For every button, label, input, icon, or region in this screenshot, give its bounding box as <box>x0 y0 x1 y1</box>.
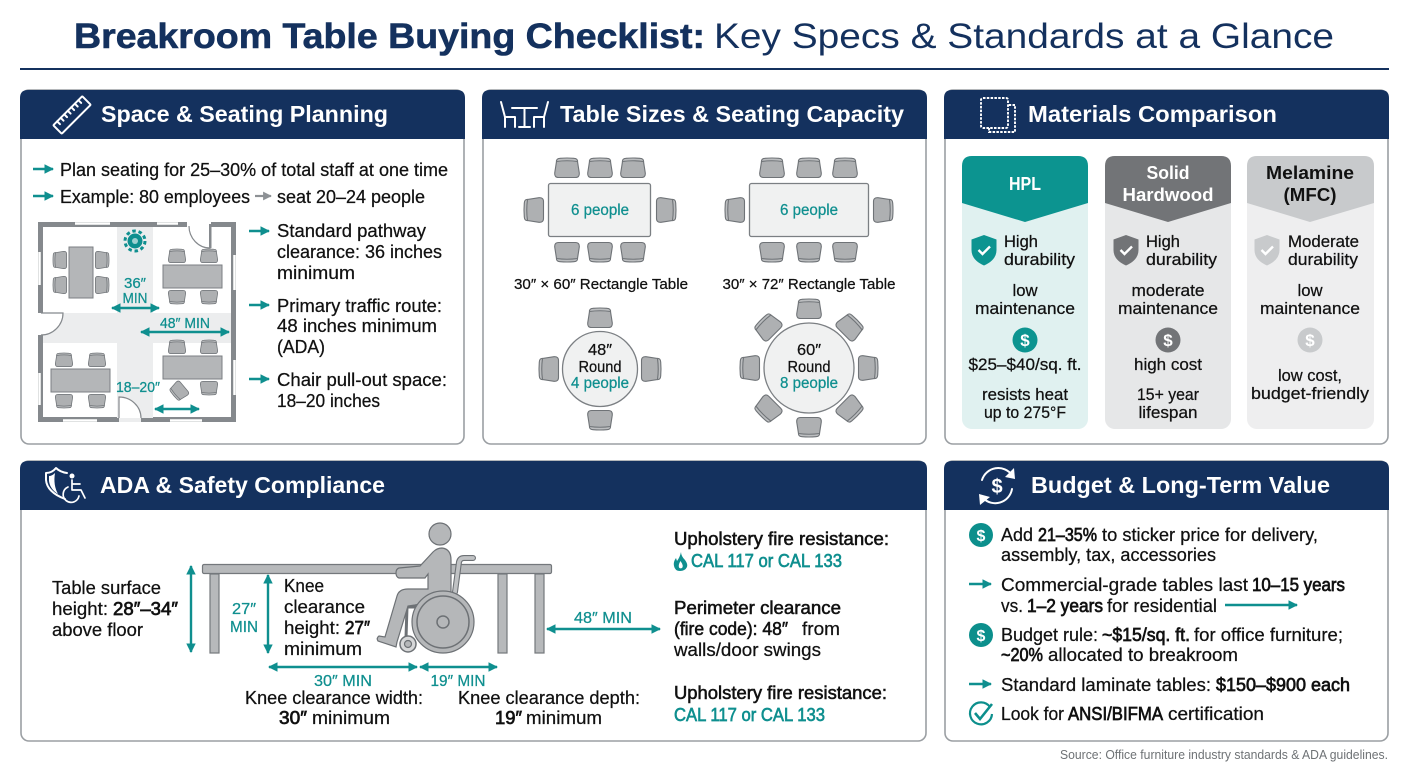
bullet: budget rule: $ <box>977 628 986 645</box>
fire resistance note with flame: Upholstery fire resistance: <box>674 529 889 549</box>
heading: space and seating planning: Space & Seating Planning <box>101 101 388 127</box>
label: knee clearance width <box>245 673 423 728</box>
card: solid hardwood: moderate <box>1132 281 1204 300</box>
title: Key Specs & Standards at a Glance <box>714 17 1334 56</box>
label: 48 inch minimum: 48″ MIN <box>574 610 632 627</box>
bullet: commercial-grade lifespan: Commercial-grade tables last <box>1001 575 1248 595</box>
clearance bullets: Chair pull-out space: <box>277 370 447 390</box>
label: knee clearance depth: Knee clearance depth: <box>458 688 640 708</box>
table: 48 inch round: 48″ <box>588 342 613 359</box>
heading: ADA and safety: ADA & Safety Compliance <box>100 472 385 498</box>
table: 30 by 60 rectangle: 6 people <box>571 202 629 219</box>
card: melamine: budget-friendly <box>1251 384 1370 403</box>
panel: space and seating planning <box>20 90 465 444</box>
source note: Source: Office furniture industry standards & ADA guidelines. <box>1060 748 1388 762</box>
bullet: commercial-grade lifespan: for residential <box>1107 596 1217 616</box>
card: HPL: HPL <box>1009 174 1041 194</box>
card: solid hardwood: Solid <box>1146 163 1190 183</box>
label: knee clearance depth: 19″ <box>495 708 523 728</box>
label: knee clearance depth <box>430 673 640 728</box>
table: 30 by 72 rectangle: 6 people <box>780 202 838 219</box>
card: melamine <box>1247 156 1374 429</box>
card: solid hardwood: 15+ year <box>1137 385 1199 404</box>
card: HPL: maintenance <box>975 299 1075 318</box>
card: solid hardwood <box>1105 156 1231 429</box>
icon: ruler <box>53 96 91 134</box>
card: melamine: low cost, <box>1278 366 1342 385</box>
label: knee clearance height: minimum <box>284 639 362 659</box>
fire resistance note: CAL 117 or CAL 133 <box>674 704 825 725</box>
clearance bullets: 48 inches minimum <box>277 316 437 336</box>
card: melamine: $ <box>1305 331 1315 350</box>
bullet: sticker price <box>969 523 1318 565</box>
card: HPL <box>962 156 1088 429</box>
clearance bullets: Standard pathway <box>277 221 426 241</box>
label: knee clearance width: 30″ <box>279 708 308 728</box>
bullet: budget rule <box>969 623 1343 665</box>
card: HPL: durability <box>1004 250 1076 269</box>
table: 48 inch round: Round <box>578 359 622 376</box>
card: HPL: low <box>1012 281 1038 300</box>
label: knee clearance height: Knee <box>284 576 324 596</box>
label: knee clearance width: minimum <box>312 708 390 728</box>
clearance bullets: 18–20 inches <box>277 391 380 411</box>
fire resistance note with flame: CAL 117 or CAL 133 <box>691 550 842 571</box>
icon: circular dollar arrows: $ <box>991 476 1003 498</box>
card: melamine: (MFC) <box>1284 185 1336 205</box>
bullet: sticker price: assembly, tax, accessories <box>1001 545 1216 565</box>
card: melamine: maintenance <box>1260 299 1360 318</box>
clearance labels: 36″ <box>124 275 147 292</box>
card: HPL: resists heat <box>982 385 1068 404</box>
bullet: laminate price: $150–$900 each <box>1216 675 1350 695</box>
perimeter clearance note: Perimeter clearance <box>674 598 841 618</box>
clearance bullets: (ADA) <box>277 337 325 357</box>
label: knee clearance height: 27″ <box>345 618 371 638</box>
bullet: sticker price: $ <box>977 528 986 545</box>
title <box>74 17 1334 56</box>
card: HPL: $ <box>1020 331 1030 350</box>
heading: table sizes: Table Sizes & Seating Capacity <box>560 101 904 127</box>
perimeter clearance note: from <box>802 619 840 639</box>
fire resistance note with flame <box>674 529 889 571</box>
label: knee clearance depth: 19″ MIN <box>430 673 486 690</box>
label: knee clearance depth: minimum <box>526 708 602 728</box>
card: solid hardwood: lifespan <box>1138 403 1198 422</box>
icon: material samples <box>981 98 1015 132</box>
label: knee clearance height: 27″ <box>232 601 256 618</box>
intro bullets: seat 20–24 people <box>277 187 425 207</box>
bullet: commercial-grade lifespan: 1–2 years <box>1027 596 1103 616</box>
bullet: certification: Look for <box>1001 704 1064 724</box>
floor plan chairs <box>53 249 218 408</box>
bullet: laminate price: Standard laminate tables: <box>1001 675 1211 695</box>
clearance labels: 18–20″ <box>116 379 161 396</box>
table: 60 inch round: 60″ <box>797 342 822 359</box>
table: 30 by 72 rectangle <box>722 158 896 293</box>
label: knee clearance height: clearance <box>284 597 365 617</box>
panel: budget and long-term value <box>944 461 1389 741</box>
card: HPL: up to 275°F <box>984 403 1066 422</box>
card: solid hardwood: high cost <box>1134 355 1202 374</box>
perimeter clearance note <box>673 598 841 660</box>
label: knee clearance width: Knee clearance width: <box>245 688 423 708</box>
label: table surface height: 28″–34″ <box>113 599 179 619</box>
panel: ADA and safety compliance <box>20 461 927 741</box>
bullet: commercial-grade lifespan <box>969 575 1345 616</box>
bullet: sticker price: 21–35% <box>1038 525 1097 545</box>
label: knee clearance width: 30″ MIN <box>314 673 372 690</box>
card: solid hardwood: maintenance <box>1118 299 1218 318</box>
table: 30 by 60 rectangle <box>514 158 688 293</box>
card: HPL: High <box>1004 232 1038 251</box>
icon: gear <box>125 231 145 251</box>
clearance bullets: minimum <box>277 263 355 283</box>
panel: materials comparison <box>944 90 1389 444</box>
clearance bullets: Primary traffic route: <box>277 296 442 316</box>
card: melamine: low <box>1298 281 1323 300</box>
perimeter clearance note: (fire code): 48″ <box>674 619 789 639</box>
heading: materials comparison: Materials Comparison <box>1028 101 1277 127</box>
label: table surface height: height: <box>52 599 108 619</box>
table side view <box>202 564 552 653</box>
card: solid hardwood: $ <box>1163 331 1173 350</box>
bullet: certification: ANSI/BIFMA <box>1068 704 1163 724</box>
table: 30 by 60 rectangle: 30″ × 60″ Rectangle Table <box>514 276 688 293</box>
bullet: budget rule: ~$15/sq. ft. <box>1102 625 1190 645</box>
clearance bullets: clearance: 36 inches <box>277 242 442 262</box>
dimension arrows <box>191 566 660 667</box>
table: 30 by 72 rectangle: 30″ × 72″ Rectangle Table <box>722 276 896 293</box>
bullet: certification: certification <box>1168 704 1264 724</box>
bullet: laminate price <box>969 675 1350 695</box>
perimeter clearance note: walls/door swings <box>673 640 821 660</box>
bullet: certification <box>970 702 1264 724</box>
title: Breakroom Table Buying Checklist: <box>74 17 705 56</box>
label: knee clearance height: height: <box>284 618 340 638</box>
bullet: budget rule: for office furniture; <box>1194 625 1343 645</box>
bullet: budget rule: ~20% <box>1001 645 1043 665</box>
clearance bullets <box>249 221 447 411</box>
intro bullets <box>33 160 448 207</box>
card: melamine: Moderate <box>1288 232 1359 251</box>
card: melamine: durability <box>1288 250 1359 269</box>
wheelchair user figure <box>377 523 474 653</box>
table: 60 inch round: 8 people <box>780 375 838 392</box>
card: melamine: Melamine <box>1266 163 1354 183</box>
clearance labels: MIN <box>122 290 148 307</box>
card: solid hardwood: High <box>1146 232 1180 251</box>
label: knee clearance height: MIN <box>230 619 258 636</box>
intro bullets: Plan seating for 25–30% of total staff at one time <box>60 160 448 180</box>
clearance labels: 48″ MIN <box>160 315 210 332</box>
table: 60 inch round: Round <box>788 359 830 376</box>
intro bullets: Example: 80 employees <box>60 187 250 207</box>
panel: table sizes and seating capacity <box>482 90 927 444</box>
bullet: commercial-grade lifespan: vs. <box>1001 596 1023 616</box>
label: table surface height: above floor <box>52 620 143 640</box>
fire resistance note <box>674 683 887 725</box>
card: solid hardwood: Hardwood <box>1122 185 1214 205</box>
icon: circular dollar arrows <box>979 468 1015 505</box>
fire resistance note: Upholstery fire resistance: <box>674 683 887 703</box>
table: 60 inch round <box>740 299 878 437</box>
label: table surface height <box>52 578 179 640</box>
bullet: budget rule: allocated to breakroom <box>1048 645 1238 665</box>
card: HPL: $25–$40/sq. ft. <box>968 355 1082 374</box>
clearance labels <box>112 275 229 409</box>
label: knee clearance height <box>230 576 371 659</box>
bullet: commercial-grade lifespan: 10–15 years <box>1252 575 1345 595</box>
floor plan tables <box>51 247 222 392</box>
bullet: budget rule: Budget rule: <box>1001 625 1098 645</box>
table: 48 inch round <box>539 308 661 430</box>
bullet: sticker price: Add <box>1001 525 1033 545</box>
table: 48 inch round: 4 people <box>571 375 629 392</box>
label: table surface height: Table surface <box>52 578 161 598</box>
icon: table and chairs <box>501 102 548 127</box>
card: solid hardwood: durability <box>1146 250 1218 269</box>
floor plan diagram <box>38 222 234 422</box>
bullet: sticker price: to sticker price for delivery, <box>1102 525 1318 545</box>
heading: budget: Budget & Long-Term Value <box>1031 472 1330 498</box>
icon: shield and wheelchair <box>46 468 85 502</box>
